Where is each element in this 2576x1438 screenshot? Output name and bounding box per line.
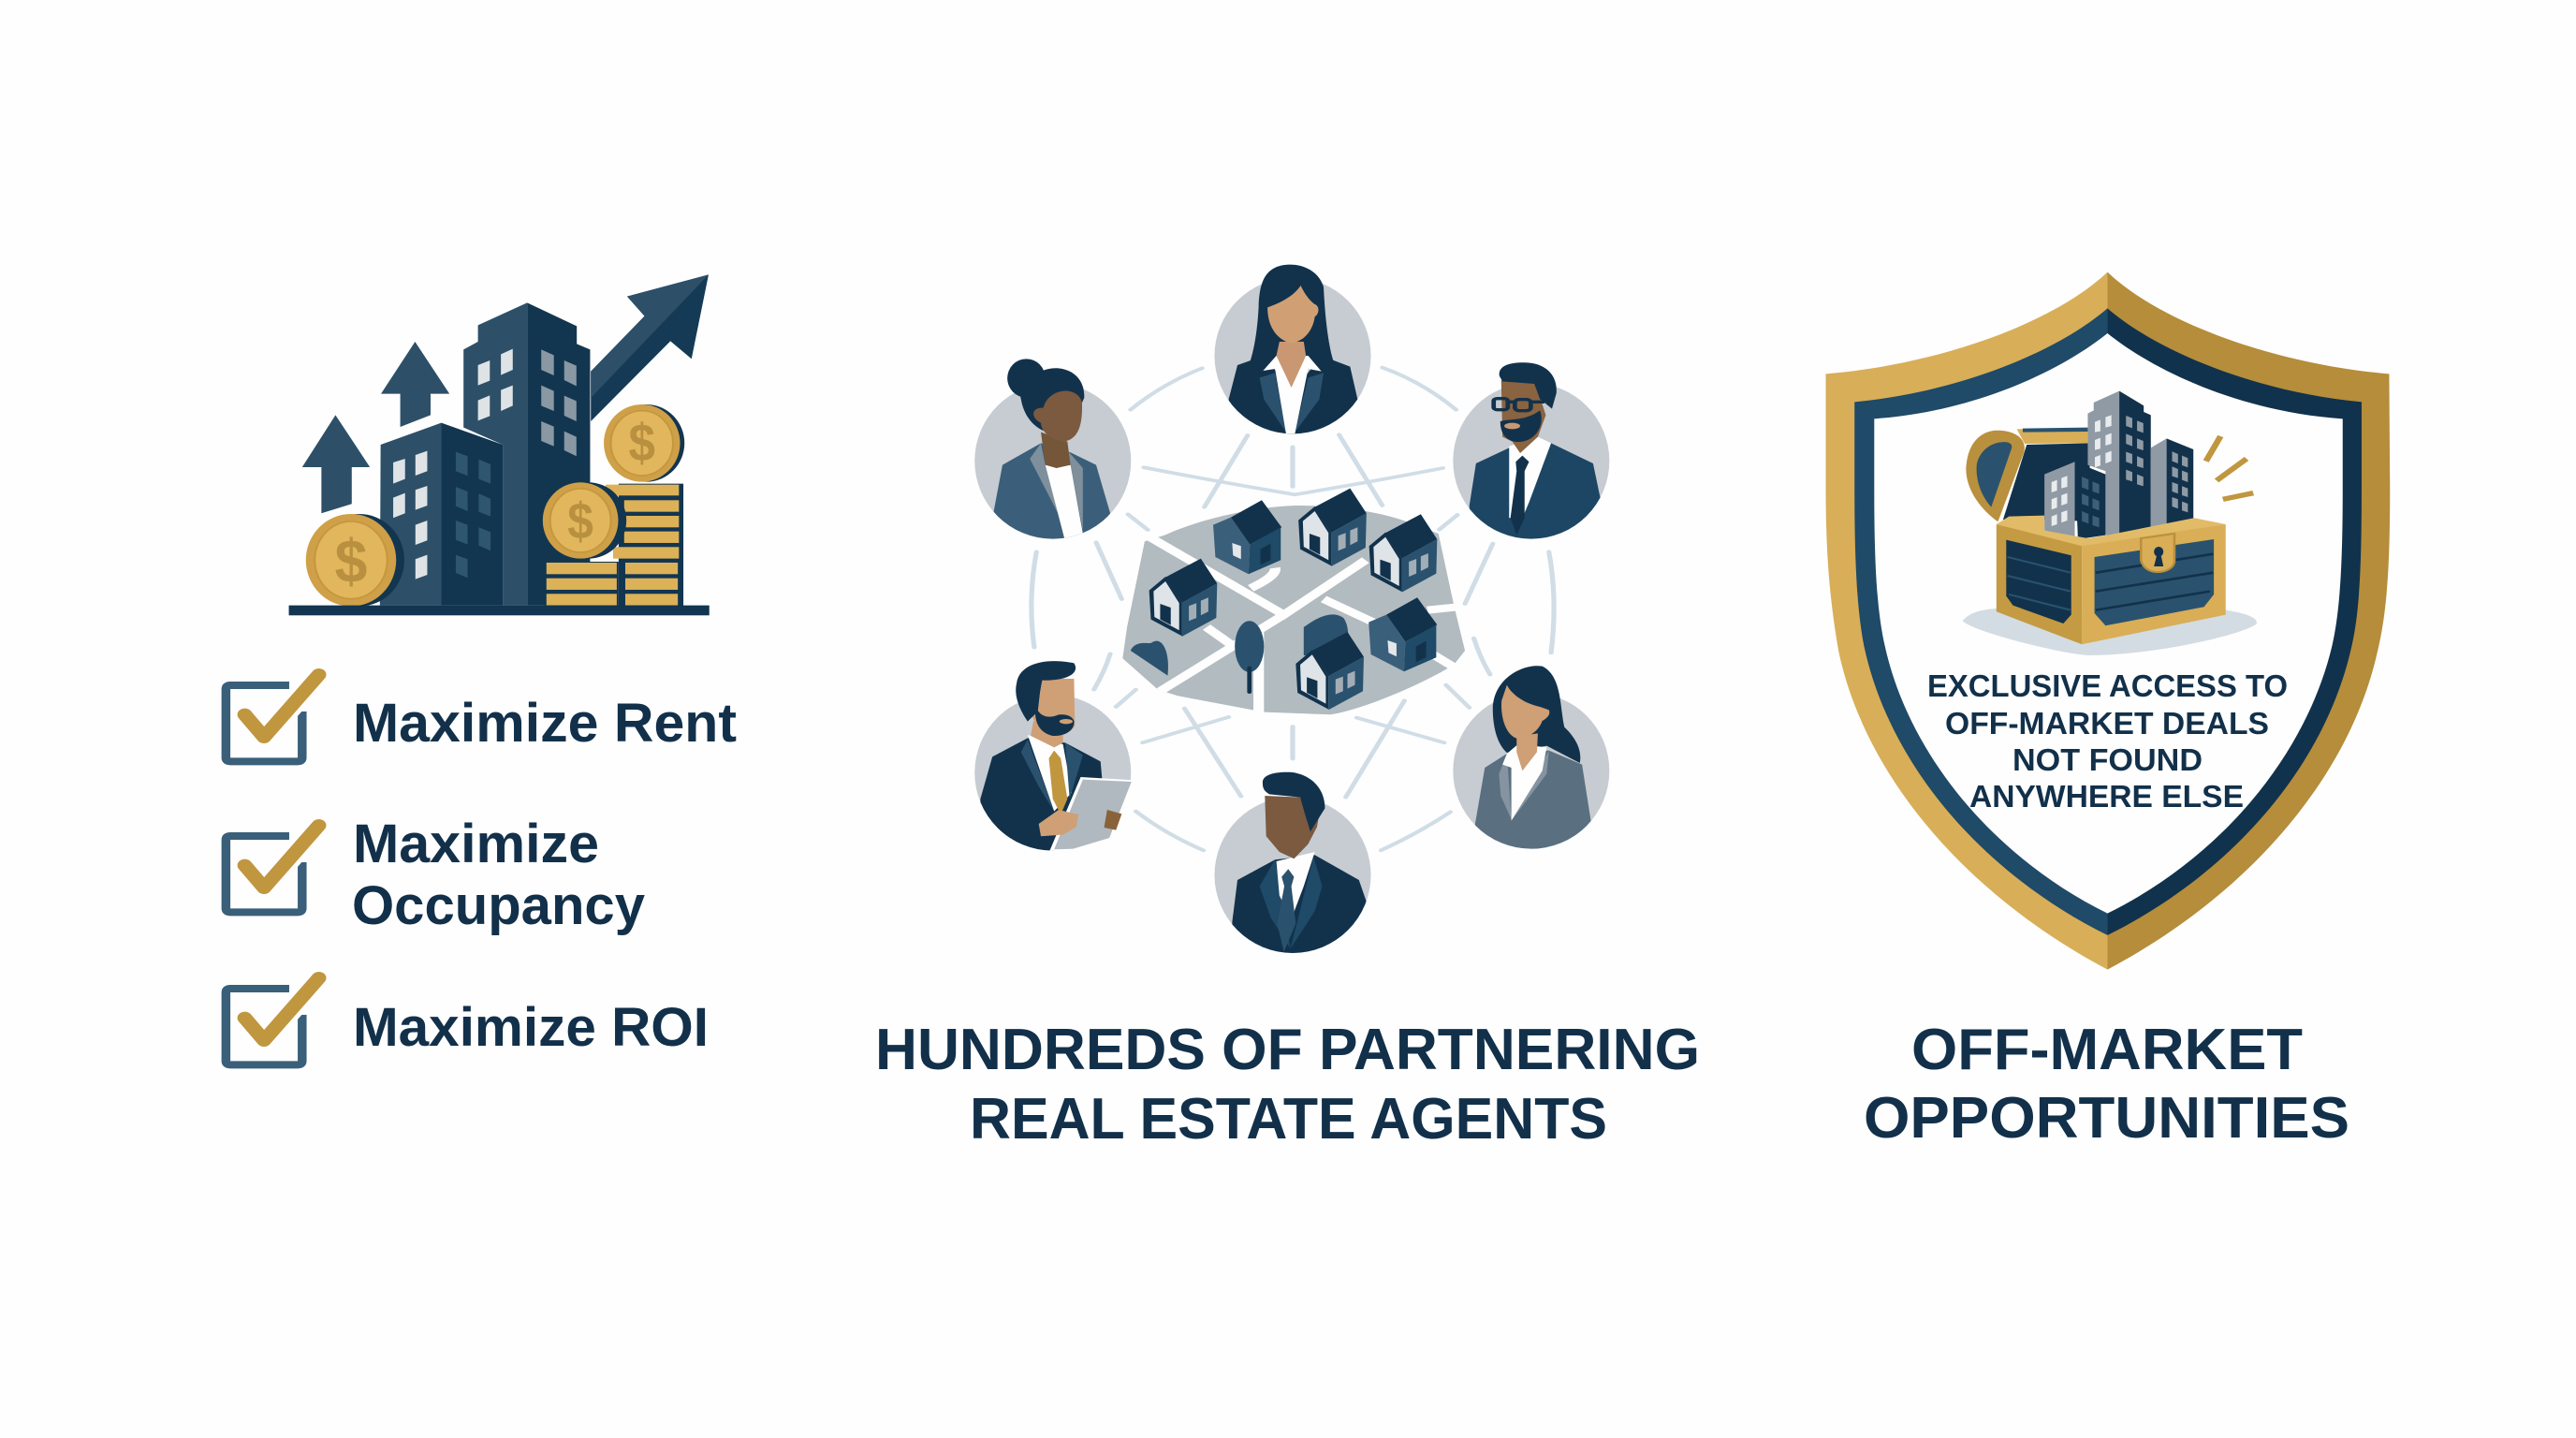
icon: house top middle — [1298, 489, 1367, 566]
heading: partnering agents: REAL ESTATE AGENTS — [970, 1087, 1607, 1152]
icon: house right — [1368, 597, 1437, 671]
tall tower — [463, 302, 590, 606]
icon: house top left — [1213, 500, 1281, 574]
icon: house left — [1149, 559, 1217, 637]
avatar: right man with glasses — [1453, 362, 1609, 543]
treasure chest body — [1997, 516, 2226, 644]
label: Occupancy — [352, 875, 645, 936]
panel: off-market opportunities — [1826, 272, 2390, 1151]
icon: coin middle — [543, 482, 626, 559]
icon: bush — [1131, 641, 1168, 676]
shield inner field — [1874, 333, 2343, 914]
coin stacks — [545, 484, 683, 606]
icon: large coin — [306, 514, 404, 607]
icon: house bottom — [1295, 632, 1364, 710]
heading: partnering agents: HUNDREDS OF PARTNERING — [875, 1018, 1700, 1082]
avatar: lower right woman — [1453, 666, 1609, 852]
avatar: lower left man with tablet — [974, 661, 1135, 855]
shield text: NOT FOUND — [2012, 742, 2203, 777]
checklist item: maximize occupancy — [226, 814, 645, 936]
checklist item: maximize roi — [226, 978, 709, 1064]
chest lock — [2141, 534, 2174, 572]
gold tie — [1049, 751, 1067, 814]
roads — [1149, 536, 1463, 714]
icon: coin middle: $ — [567, 492, 593, 550]
shield text: OFF-MARKET DEALS — [1945, 706, 2269, 741]
label: Maximize Rent — [353, 693, 737, 754]
avatar: top woman — [1214, 265, 1371, 440]
treasure chest lid — [1966, 428, 2090, 521]
icon: checkbox — [226, 978, 319, 1064]
panel: maximize returns — [226, 274, 737, 1064]
panel: partner network — [875, 265, 1700, 1152]
arrow: small rising arrow — [302, 415, 370, 513]
label: Maximize — [353, 814, 599, 874]
avatar: bottom man — [1214, 772, 1371, 955]
icon: checkbox — [226, 826, 319, 912]
shield text: ANYWHERE ELSE — [1969, 779, 2244, 814]
chest shadow — [1963, 609, 2257, 655]
icon: buildings with rising arrows and coins — [289, 274, 710, 615]
shield navy band — [1854, 308, 2362, 935]
heading: off-market opportunities: OPPORTUNITIES — [1864, 1086, 2349, 1151]
heading: off-market opportunities: OFF-MARKET — [1911, 1018, 2303, 1082]
checklist item: maximize rent — [226, 675, 737, 761]
ground line — [289, 606, 710, 615]
label: Maximize ROI — [353, 997, 709, 1058]
neighborhood map with houses — [1122, 489, 1465, 714]
arrow: medium rising arrow — [381, 342, 449, 427]
network connection lines — [1032, 368, 1554, 850]
buildings in chest — [2044, 391, 2193, 539]
shield text: EXCLUSIVE ACCESS TO — [1927, 668, 2288, 703]
sparkle rays — [2206, 436, 2253, 499]
icon: shield badge — [1826, 272, 2390, 970]
shield gold border — [1826, 272, 2390, 970]
icon: tree — [1235, 621, 1264, 692]
icon: coin right top: $ — [629, 415, 655, 473]
front building — [380, 423, 503, 606]
tree behind house — [1304, 614, 1348, 655]
arrow: large growth arrow — [591, 274, 709, 421]
icon: coin right top — [604, 404, 684, 482]
avatar: left woman — [974, 359, 1131, 543]
icon: large coin: $ — [335, 527, 367, 595]
map ground — [1122, 506, 1465, 714]
icon: house top right — [1369, 514, 1437, 593]
icon: checkbox — [226, 675, 319, 761]
